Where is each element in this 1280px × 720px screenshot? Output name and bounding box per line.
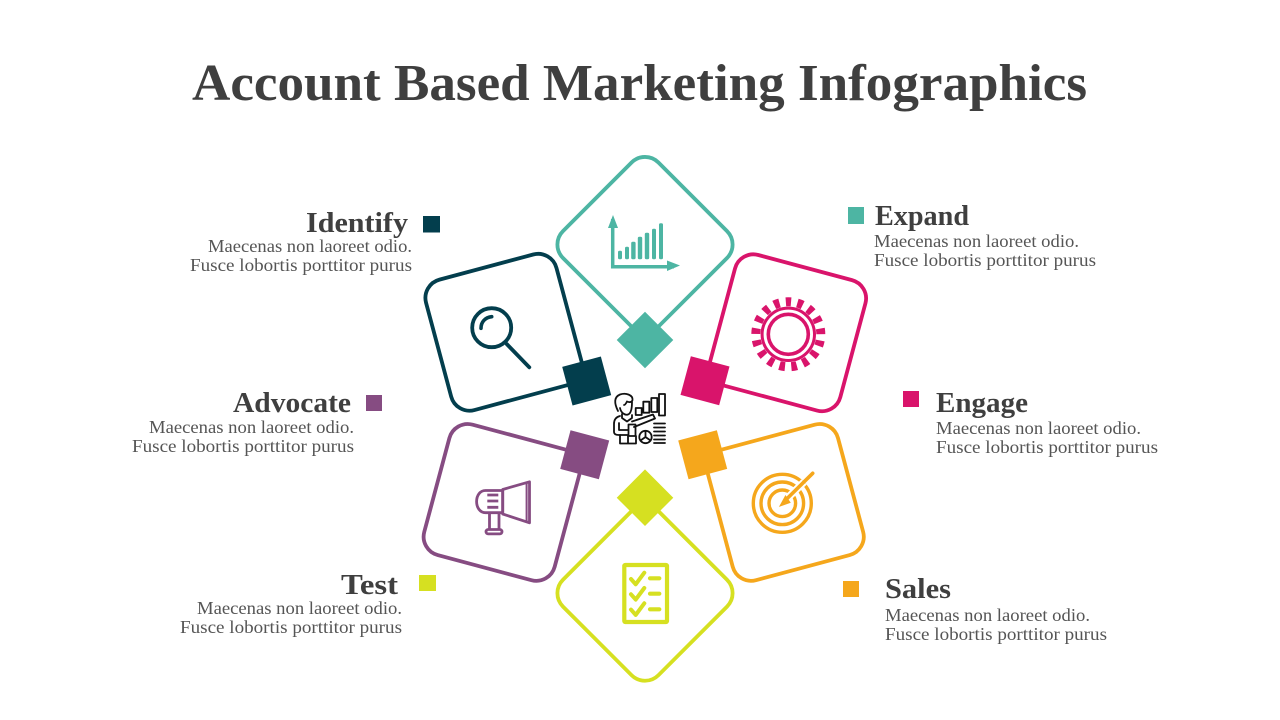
panel: test tile <box>550 498 740 689</box>
text block: identify: Identify <box>306 208 408 239</box>
text block: engage: Fusce lobortis porttitor purus <box>936 437 1158 457</box>
text block: expand: Expand <box>875 201 969 232</box>
legend square: identify <box>423 216 440 232</box>
text block: sales: Sales <box>885 574 951 605</box>
icon: magnifying glass <box>472 308 529 367</box>
marker: identify square <box>562 357 611 405</box>
text block: test: Fusce lobortis porttitor purus <box>180 617 402 637</box>
title: Account Based Marketing Infographics <box>192 55 1087 112</box>
icon: presenter with charts <box>614 394 665 444</box>
marker: expand diamond <box>617 312 673 368</box>
marker: advocate square <box>560 430 609 479</box>
legend square: sales <box>843 581 859 597</box>
panel: advocate tile <box>419 420 585 585</box>
text block: advocate: Maecenas non laoreet odio. <box>149 417 354 437</box>
text block: expand: Fusce lobortis porttitor purus <box>874 250 1096 270</box>
text block: identify <box>190 208 412 275</box>
icon: checklist <box>624 565 667 622</box>
legend square: test <box>419 575 436 591</box>
text block: identify: Fusce lobortis porttitor purus <box>190 255 412 275</box>
text block: sales: Maecenas non laoreet odio. <box>885 605 1090 625</box>
text block: engage <box>936 388 1158 457</box>
panel: expand tile <box>550 149 740 340</box>
marker: engage square <box>681 356 729 405</box>
marker: sales square <box>678 430 727 479</box>
panel: identify tile <box>421 250 586 415</box>
text block: engage: Engage <box>936 388 1028 419</box>
text block: advocate: Fusce lobortis porttitor purus <box>132 436 354 456</box>
panel: engage tile <box>705 250 870 415</box>
text block: test: Test <box>341 570 399 601</box>
text block: expand: Maecenas non laoreet odio. <box>874 231 1079 251</box>
icon: megaphone <box>477 482 530 534</box>
text block: expand <box>874 201 1096 270</box>
text block: advocate: Advocate <box>233 388 351 419</box>
icon: sun gear <box>756 302 821 367</box>
text block: sales: Fusce lobortis porttitor purus <box>885 624 1107 644</box>
text block: advocate <box>132 388 354 456</box>
legend square: advocate <box>366 395 382 411</box>
text block: engage: Maecenas non laoreet odio. <box>936 418 1141 438</box>
legend square: expand <box>848 207 864 224</box>
panel: sales tile <box>703 420 868 585</box>
legend square: engage <box>903 391 919 407</box>
text block: test: Maecenas non laoreet odio. <box>197 598 402 618</box>
text block: identify: Maecenas non laoreet odio. <box>208 236 412 256</box>
text block: test <box>180 570 402 637</box>
icon: target with arrow <box>753 473 813 532</box>
icon: growth chart <box>608 215 680 271</box>
marker: test diamond <box>617 469 673 526</box>
text block: sales <box>885 574 1107 644</box>
